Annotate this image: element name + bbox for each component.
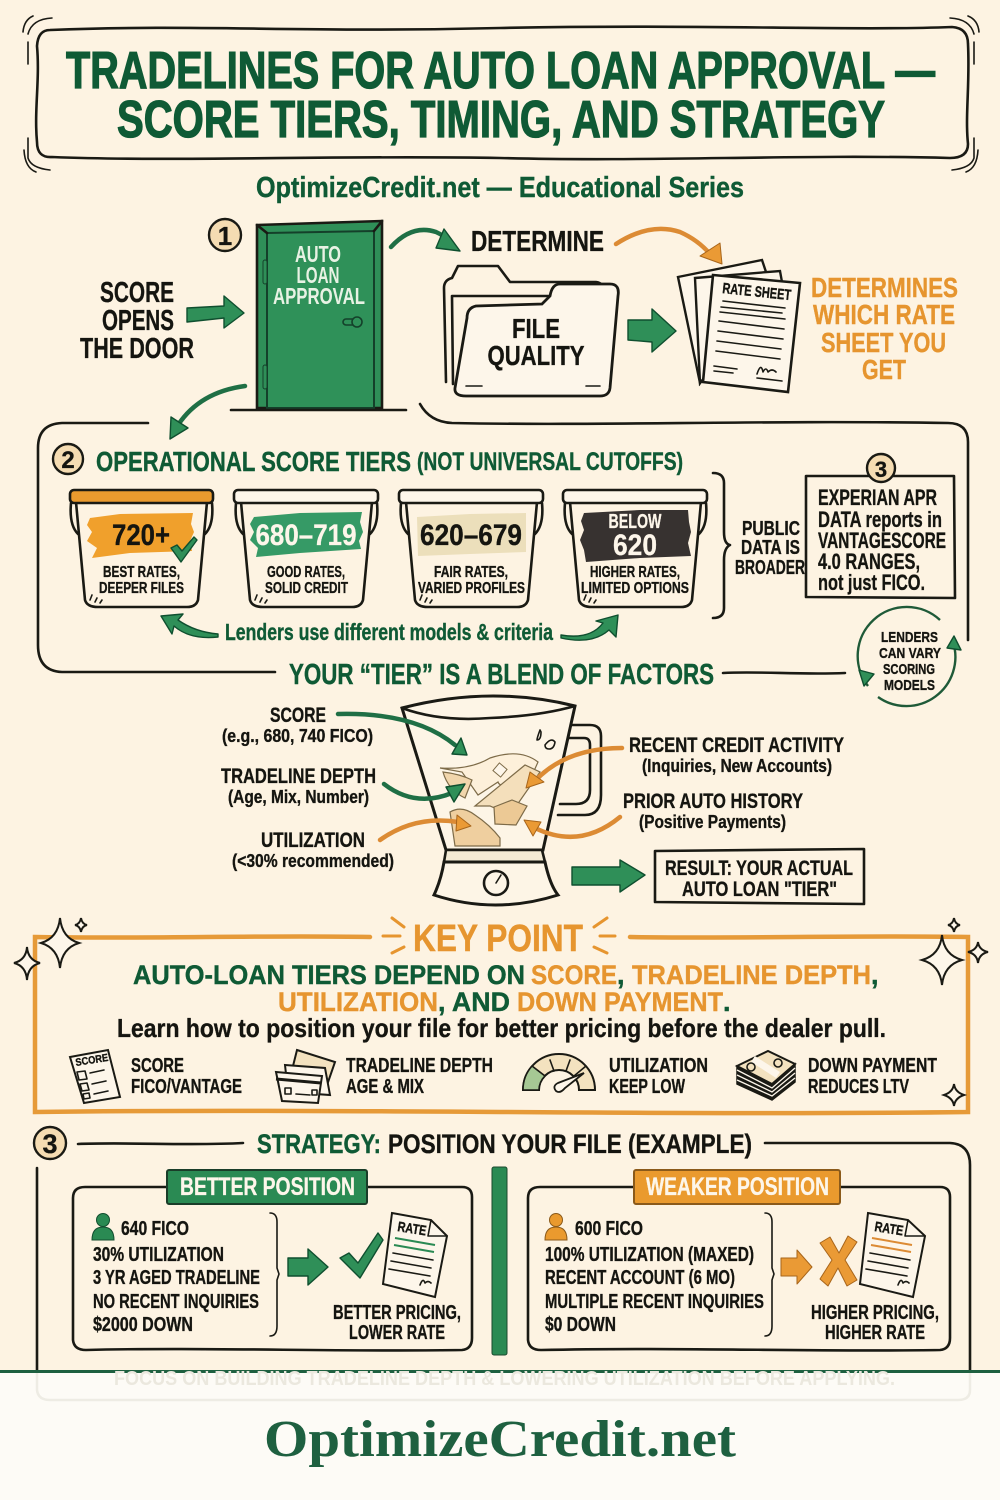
arrow: blender to result [572, 860, 645, 892]
step 3 badge: 3 [42, 1129, 58, 1159]
panel: better position: $2000 DOWN [93, 1314, 193, 1336]
bucket: 620-679: FAIR RATES, [434, 564, 508, 581]
sparkles [14, 918, 988, 1106]
bucket: 620-679: VARIED PROFILES [418, 580, 525, 597]
step 3 badge [34, 1127, 66, 1159]
panel: weaker position: $0 DOWN [545, 1314, 616, 1336]
key point message: SCORE [531, 960, 617, 990]
panel: weaker position: 600 FICO [575, 1218, 643, 1240]
score opens the door label: THE DOOR [80, 333, 194, 365]
panel: weaker position: MULTIPLE RECENT INQUIRIES [545, 1291, 764, 1313]
label: score item [131, 1055, 242, 1098]
footer band: FOCUS ON BUILDING TRADELINE DEPTH & LOWERING UTILIZATION BEFORE APPLYING. [114, 1368, 895, 1390]
bucket: 720+ [70, 490, 213, 607]
heading: strategy [257, 1129, 752, 1159]
panel: weaker position: RECENT ACCOUNT (6 MO) [545, 1267, 735, 1289]
label: score item: SCORE [131, 1055, 184, 1077]
arrow: file to rate sheet [628, 309, 676, 352]
heading: operational score tiers: OPERATIONAL SCORE TIERS [96, 446, 411, 477]
bucket: 680-719 [234, 490, 378, 607]
callout: determines which rate sheet you get: DETERMINES [811, 272, 958, 303]
folder: file quality [444, 266, 618, 396]
panel frame: score tiers [38, 404, 968, 674]
key point message: , AND [438, 987, 510, 1017]
score opens the door label: SCORE [100, 277, 174, 309]
bucket: below 620: BELOW [608, 511, 662, 533]
arrow: determine to rate sheet [616, 229, 722, 264]
lenders note with arrows: Lenders use different models & criteria [225, 619, 553, 645]
badge: lenders can vary scoring models [858, 607, 961, 706]
panel frame: strategy [37, 1143, 970, 1372]
panel: better position: RATE [397, 1218, 428, 1238]
panel: weaker position: HIGHER PRICING, [811, 1302, 939, 1324]
footer band [0, 1368, 1000, 1500]
label: down payment item: DOWN PAYMENT [808, 1055, 937, 1077]
callout: determines which rate sheet you get: GET [862, 354, 906, 385]
label: tradeline depth item: AGE & MIX [346, 1076, 424, 1098]
bucket: 620-679: 620–679 [420, 519, 522, 552]
badge: lenders can vary scoring models: SCORING [883, 661, 935, 678]
label: utilization item [609, 1055, 708, 1098]
arrow: utilization into blender [380, 815, 471, 840]
folder: file quality: QUALITY [488, 340, 585, 371]
key point message: AUTO-LOAN TIERS DEPEND ON [133, 960, 525, 990]
bucket: below 620 [563, 490, 707, 607]
badge: lenders can vary scoring models: MODELS [884, 677, 935, 694]
callout box: experian apr data: 3 [875, 457, 887, 482]
title banner [23, 16, 979, 172]
callout box: experian apr data: VANTAGESCORE [818, 528, 946, 553]
key point message: , [617, 960, 625, 990]
door: auto loan approval: APPROVAL [273, 283, 365, 309]
bucket: 680-719: 680–719 [256, 519, 356, 552]
footer band: OptimizeCredit.net [264, 1411, 737, 1468]
bucket: 680-719: SOLID CREDIT [265, 580, 348, 597]
key point message: TRADELINE DEPTH [632, 960, 871, 990]
label: tradeline depth factor: (Age, Mix, Number) [228, 787, 369, 807]
bucket: below 620: 620 [613, 529, 657, 562]
step 2 badge: 2 [61, 447, 75, 474]
label: prior auto history factor: PRIOR AUTO HISTORY [623, 790, 803, 813]
step 2 badge [53, 444, 83, 474]
key point message: DOWN PAYMENT [517, 987, 723, 1017]
bucket: 680-719: GOOD RATES, [267, 564, 345, 581]
panel frame: key point [35, 936, 968, 1113]
bucket: below 620: HIGHER RATES, [590, 564, 680, 581]
panel: better position [73, 1170, 472, 1350]
result box [655, 849, 864, 904]
icon: score sheet [70, 1050, 120, 1103]
step 1 badge: 1 [218, 221, 232, 251]
panel: weaker position [528, 1170, 950, 1350]
panel: better position: 30% UTILIZATION [93, 1244, 224, 1266]
step 1 badge [209, 219, 241, 251]
label: tradeline depth factor: TRADELINE DEPTH [221, 765, 376, 788]
panel: weaker position: HIGHER RATE [825, 1322, 925, 1344]
score opens the door label [80, 277, 194, 365]
heading: operational score tiers [96, 446, 683, 477]
panel: weaker position: RATE [874, 1218, 905, 1238]
panel: better position: LOWER RATE [349, 1322, 445, 1344]
heading: strategy: POSITION YOUR FILE (EXAMPLE) [388, 1129, 752, 1159]
label: prior auto history factor [623, 790, 803, 832]
callout: determines which rate sheet you get: WHICH RATE [813, 299, 955, 330]
callout: determines which rate sheet you get [811, 272, 958, 385]
bucket: 720+: 720+ [112, 519, 170, 552]
lenders note with arrows [161, 614, 618, 645]
door: auto loan approval: LOAN [296, 262, 340, 288]
key point message [133, 960, 879, 1017]
arrow: score to door [187, 296, 244, 328]
label: prior auto history factor: (Positive Payments) [639, 812, 786, 832]
key point message: UTILIZATION [278, 987, 438, 1017]
label: utilization item: UTILIZATION [609, 1055, 708, 1077]
note: public data is broader: DATA IS [741, 537, 800, 559]
label: recent credit activity factor: RECENT CREDIT ACTIVITY [629, 734, 844, 757]
label: tradeline depth factor [221, 765, 376, 807]
badge: lenders can vary scoring models: CAN VARY [879, 645, 941, 662]
heading: your tier is a blend: YOUR “TIER” IS A BLEND OF FACTORS [289, 659, 714, 691]
callout box: experian apr data: 4.0 RANGES, [818, 549, 920, 574]
label: tradeline depth item [346, 1055, 493, 1098]
door: auto loan approval [231, 221, 406, 410]
bucket: 720+: DEEPER FILES [99, 580, 184, 597]
label: down payment item [808, 1055, 937, 1098]
label: utilization factor: (<30% recommended) [232, 851, 394, 871]
panel: weaker position: WEAKER POSITION [646, 1173, 829, 1201]
subtitle: OptimizeCredit.net — Educational Series [256, 172, 744, 204]
arrow: door to determine [391, 229, 460, 251]
heading: strategy: STRATEGY: [257, 1129, 381, 1159]
blender illustration [402, 696, 601, 905]
label: utilization item: KEEP LOW [609, 1076, 685, 1098]
label: score factor: (e.g., 680, 740 FICO) [222, 726, 373, 746]
label: score factor: SCORE [270, 704, 326, 727]
callout box: experian apr data: EXPERIAN APR [818, 485, 937, 510]
label: tradeline depth item: TRADELINE DEPTH [346, 1055, 493, 1077]
panel: better position: BETTER PRICING, [333, 1302, 461, 1324]
label: utilization factor: UTILIZATION [261, 829, 365, 852]
panel: better position: NO RECENT INQUIRIES [93, 1291, 259, 1313]
heading: operational score tiers: (NOT UNIVERSAL CUTOFFS) [417, 448, 683, 476]
callout: determines which rate sheet you get: SHEET YOU [821, 327, 946, 358]
callout box: experian apr data [806, 454, 955, 598]
brace: public data [713, 473, 730, 618]
arrow: door down to tiers [170, 386, 245, 439]
callout box: experian apr data: DATA reports in [818, 507, 942, 532]
icon: utilization gauge [523, 1054, 595, 1092]
label: score item: FICO/VANTAGE [131, 1076, 242, 1098]
note: public data is broader: PUBLIC [742, 518, 800, 540]
note: public data is broader [735, 518, 805, 579]
arrow: score into blender [338, 714, 467, 755]
key point message: . [723, 987, 731, 1017]
label: score factor [222, 704, 373, 746]
arrow: tradeline depth into blender [384, 784, 465, 802]
panel: better position: BETTER POSITION [180, 1173, 355, 1201]
icon: score sheet: SCORE [75, 1052, 109, 1069]
note: public data is broader: BROADER [735, 557, 805, 579]
rate sheet stack [678, 260, 800, 392]
rate sheet stack: RATE SHEET [722, 280, 792, 304]
score opens the door label: OPENS [102, 305, 174, 337]
icon: credit cards [276, 1050, 335, 1103]
result box: RESULT: YOUR ACTUAL [665, 857, 853, 880]
door: auto loan approval: AUTO [295, 241, 341, 267]
result box: AUTO LOAN "TIER" [682, 878, 837, 901]
key point message: , [871, 960, 879, 990]
heading: key point: KEY POINT [413, 918, 583, 960]
bucket: 720+: BEST RATES, [103, 564, 180, 581]
determine label: DETERMINE [471, 226, 604, 258]
bucket: 620-679 [399, 490, 543, 607]
panel: better position: 640 FICO [121, 1218, 189, 1240]
label: down payment item: REDUCES LTV [808, 1076, 909, 1098]
divider [492, 1167, 507, 1355]
icon: money stack [737, 1051, 795, 1100]
badge: lenders can vary scoring models: LENDERS [881, 629, 938, 646]
arrow: prior history into blender [524, 817, 620, 837]
label: recent credit activity factor: (Inquiries, New Accounts) [642, 756, 832, 776]
arrow: recent activity into blender [526, 748, 622, 788]
panel: better position: 3 YR AGED TRADELINE [93, 1267, 260, 1289]
panel: weaker position: 100% UTILIZATION (MAXED) [545, 1244, 754, 1266]
label: recent credit activity factor [629, 734, 844, 776]
key point subline: Learn how to position your file for better pricing before the dealer pull. [117, 1013, 886, 1043]
callout box: experian apr data: not just FICO. [818, 570, 925, 595]
folder: file quality: FILE [512, 313, 560, 344]
label: utilization factor [232, 829, 394, 871]
bucket: below 620: LIMITED OPTIONS [581, 580, 689, 597]
